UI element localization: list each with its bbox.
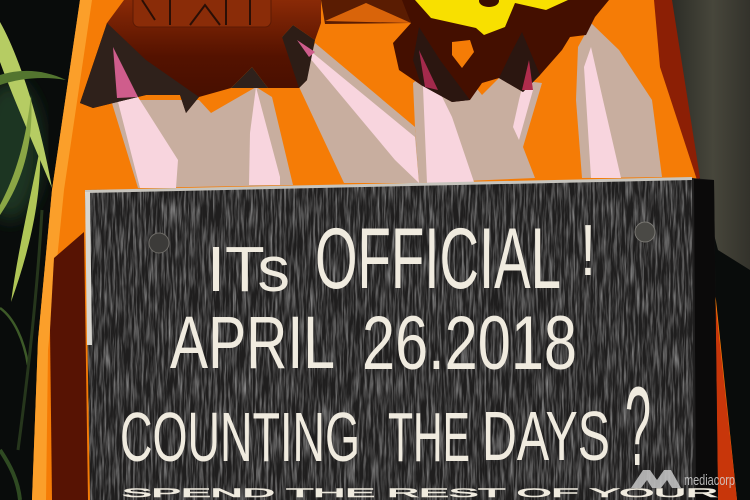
chalk lettering — [120, 211, 719, 500]
line 1: ITs: ITs — [207, 233, 290, 305]
painted teeth: pink centres — [113, 40, 621, 188]
line 3: DAYS: DAYS — [482, 397, 610, 475]
decorative carved panel — [133, 0, 411, 27]
painted teeth: beige outlines — [111, 23, 662, 188]
line 2: date: 26.2018 — [362, 301, 577, 386]
yellow shape hole — [479, 0, 499, 7]
line 2: APRIL: APRIL — [170, 301, 335, 384]
line 3: THE: THE — [388, 398, 470, 476]
line 1: exclamation: ! — [580, 211, 596, 291]
mediacorp watermark — [631, 470, 735, 489]
yellow shape — [415, 0, 568, 35]
board screws — [149, 222, 655, 253]
shadowed teeth — [80, 23, 199, 113]
plant leaves — [0, 22, 66, 500]
background: blurred wall right — [668, 0, 750, 270]
chalk lettering: ? — [625, 364, 651, 489]
board top shadow — [80, 0, 609, 113]
line 1: OFFICIAL: OFFICIAL — [315, 211, 561, 307]
upper shadow band between panels — [321, 0, 411, 24]
line 3: COUNTING: COUNTING — [120, 398, 360, 476]
shadow gap — [452, 40, 474, 68]
line 4 tops of letters at frame edge: SPEND THE REST OF YOUR — [122, 486, 719, 500]
chalkboard — [85, 177, 718, 500]
